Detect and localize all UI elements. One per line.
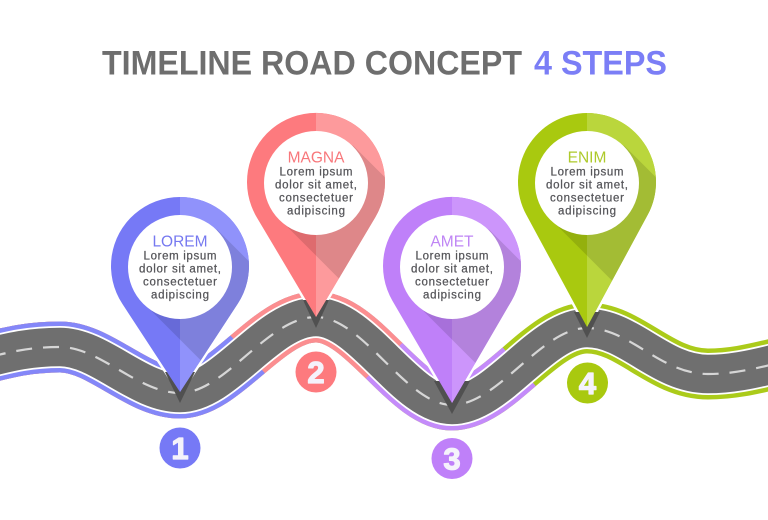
pin 4: Enim: dolor sit amet, (546, 180, 628, 192)
pin 4: Enim: consectetuer (550, 192, 624, 204)
badge 4 (567, 362, 608, 404)
pin 2: Magna: dolor sit amet, (275, 180, 357, 192)
title: TIMELINE ROAD CONCEPT (102, 44, 522, 82)
badge 1: 1 (171, 431, 189, 466)
pin 1: Lorem: adipiscing (151, 290, 209, 302)
pin 1: Lorem: Lorem ipsum (144, 250, 216, 262)
badge 1 (160, 428, 200, 468)
pin 3: Amet: AMET (430, 234, 474, 250)
pin 4: Enim: Lorem ipsum (550, 166, 624, 178)
badge 4: 4 (579, 366, 597, 401)
pin 3: Amet: dolor sit amet, (411, 264, 493, 276)
pin 2: Magna (247, 112, 385, 328)
winding road (0, 317, 768, 405)
pin 1: Lorem: consectetuer (143, 276, 217, 288)
title: 4 STEPS (534, 44, 667, 82)
pin 4: Enim (518, 113, 656, 338)
pin 4: Enim: adipiscing (558, 206, 616, 218)
pin 1: Lorem: LOREM (152, 234, 208, 250)
badge 2: 2 (307, 355, 325, 390)
pin 3: Amet: adipiscing (423, 290, 481, 302)
pin 4: Enim: ENIM (568, 150, 606, 166)
pin 2: Magna: consectetuer (279, 192, 353, 204)
pin 1: Lorem: dolor sit amet, (139, 264, 221, 276)
pin 2: Magna: adipiscing (287, 206, 345, 218)
pin 3: Amet: consectetuer (415, 276, 489, 288)
pin 1: Lorem (111, 197, 249, 402)
pin 3: Amet (383, 196, 521, 414)
pin 2: Magna: Lorem ipsum (280, 166, 352, 178)
badge 2 (296, 352, 336, 392)
badge 3 (432, 438, 472, 479)
badge 3: 3 (443, 442, 461, 476)
pin 3: Amet: Lorem ipsum (416, 250, 488, 262)
pin 2: Magna: MAGNA (288, 150, 345, 166)
